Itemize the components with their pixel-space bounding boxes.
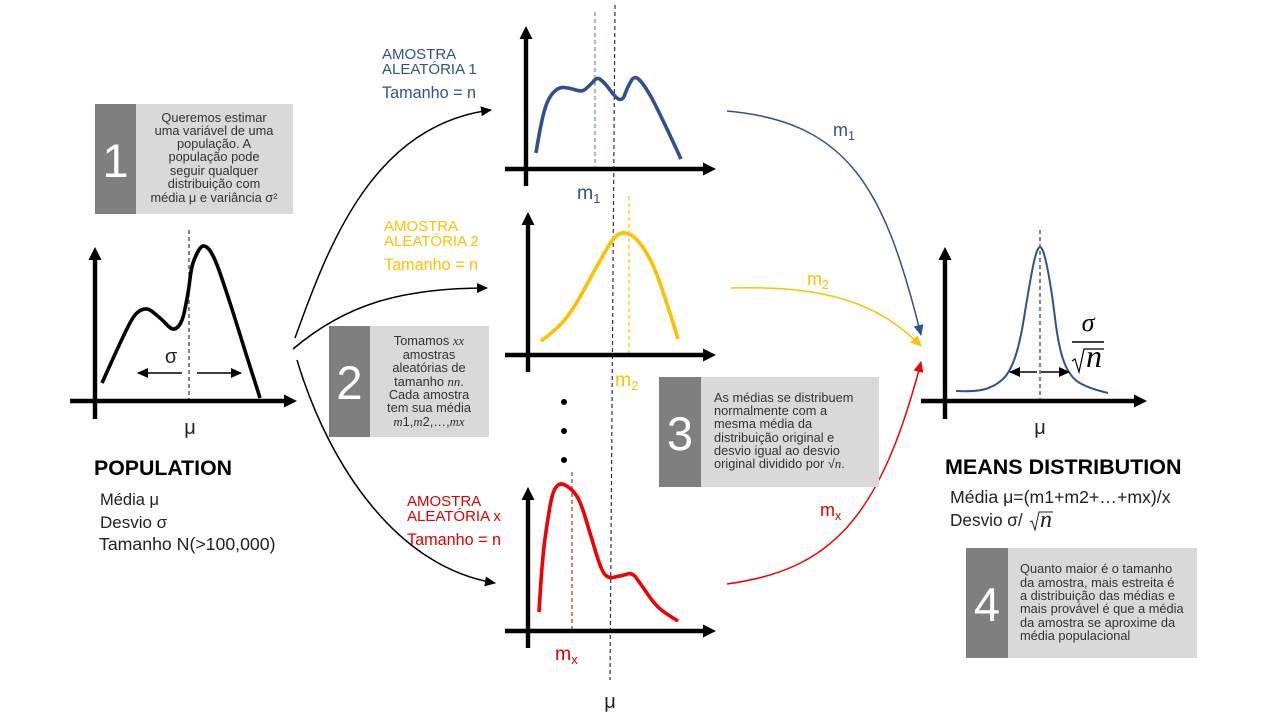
population mean line across samples <box>610 5 615 680</box>
chart: sample x <box>505 472 716 713</box>
panel: step 4 <box>966 548 1197 658</box>
text block 2: Tomamos xx <box>394 333 464 348</box>
label: sample 1: Tamanho = n <box>382 84 476 102</box>
number 4: 4 <box>974 578 1000 631</box>
text block 3: normalmente com a <box>714 403 828 418</box>
chart: sample 1 <box>505 12 716 206</box>
number 3: 3 <box>667 407 693 460</box>
text block: means stats: Média μ=(m1+m2+…+mx)/x <box>950 487 1171 507</box>
flow label mx: m <box>820 500 835 520</box>
label mx: m <box>555 643 571 665</box>
text block 4: da amostra, mais estreita é <box>1020 575 1174 590</box>
text block 1: Queremos estimar <box>161 110 267 125</box>
number 1: 1 <box>102 134 129 187</box>
label: sample 1: ALEATÓRIA 1 <box>382 61 477 78</box>
ellipsis dots <box>561 399 567 463</box>
flow label m1: m <box>833 120 848 140</box>
text block 1: distribuição com <box>168 176 260 191</box>
fraction sigma over root n <box>1072 308 1104 374</box>
flow label mx: x <box>835 509 842 523</box>
fraction sigma over root n: σ <box>1082 308 1096 337</box>
text block 1: população. A <box>177 136 251 151</box>
chart: population distribution <box>70 230 297 439</box>
number 2: 2 <box>336 356 363 409</box>
sigma label: σ <box>165 346 178 368</box>
heading: means distribution: MEANS DISTRIBUTION <box>945 455 1182 479</box>
mu label: μ <box>1034 417 1046 439</box>
text block 1: uma variável de uma <box>155 123 274 138</box>
panel: step 2 <box>329 326 489 437</box>
label m1: m <box>577 182 593 204</box>
label: sample x: Tamanho = n <box>407 531 501 549</box>
panel: step 1 <box>95 104 293 214</box>
text block 4: média populacional <box>1020 628 1130 643</box>
text block 4: da amostra se aproxime da <box>1020 615 1176 630</box>
label m2: m <box>615 369 631 391</box>
text block 2: tamanho nn. <box>394 374 464 389</box>
text block 4: Quanto maior é o tamanho <box>1020 561 1172 576</box>
label: sample 2: Tamanho = n <box>384 256 478 274</box>
text block 3: distribuição original e <box>714 430 834 445</box>
text block 3: mesma média da <box>714 416 813 431</box>
label m1: 1 <box>593 191 600 206</box>
flow arrow: sample 2 to means distribution <box>731 288 921 346</box>
chart: sample 2 <box>505 196 716 393</box>
text block 2: tem sua média <box>387 400 472 415</box>
flow arrow: sample x to means distribution <box>727 362 921 584</box>
flow arrows: population to samples <box>293 110 495 583</box>
text block 2: m1,m2,…,mx <box>393 414 465 429</box>
text block: population stats: Desvio σ <box>100 513 168 532</box>
label: sample x: AMOSTRA <box>407 493 481 510</box>
text block: population stats: Média μ <box>100 491 159 509</box>
fraction sigma over root n: n <box>1086 338 1102 374</box>
text block 2: amostras <box>403 347 455 362</box>
text block 2: Cada amostra <box>389 387 470 402</box>
label m2: 2 <box>631 378 638 393</box>
flow arrow: sample 1 to means distribution <box>727 111 921 335</box>
text block: means stats: n <box>1040 507 1052 533</box>
label mx: x <box>571 652 578 667</box>
heading: population: POPULATION <box>94 456 232 480</box>
label: sample 2: AMOSTRA <box>384 218 458 235</box>
mu label: μ <box>184 417 196 439</box>
width arrows <box>1010 371 1069 373</box>
text block: means stats <box>950 487 1171 533</box>
text block 3: original dividido por √n. <box>714 456 845 471</box>
text block 4: mais provável é que a média <box>1020 601 1184 616</box>
flow label m2: m <box>807 269 822 289</box>
text block 1: seguir qualquer <box>170 163 259 178</box>
text block 1: média μ e variância σ² <box>151 190 278 205</box>
label: sample 2: ALEATÓRIA 2 <box>384 233 479 250</box>
label mu: μ <box>604 691 616 713</box>
chart: means distribution <box>921 230 1147 439</box>
flow label m2: 2 <box>822 278 829 292</box>
text block: population stats: Tamanho N(>100,000) <box>99 534 276 554</box>
text block 3: desvio igual ao desvio <box>714 443 840 458</box>
label: sample x: ALEATÓRIA x <box>407 508 501 525</box>
panel: step 3 <box>659 377 879 487</box>
text block 1: população pode <box>168 149 260 164</box>
text block: means stats: Desvio σ/ <box>950 510 1023 530</box>
label: sample 1: AMOSTRA <box>382 46 456 63</box>
text block 4: a distribuição das médias e <box>1020 588 1175 603</box>
text block 2: aleatórias de <box>392 360 466 375</box>
flow label m1: 1 <box>848 129 855 143</box>
text block 3: As médias se distribuem <box>714 390 853 405</box>
sigma arrows <box>138 372 241 374</box>
